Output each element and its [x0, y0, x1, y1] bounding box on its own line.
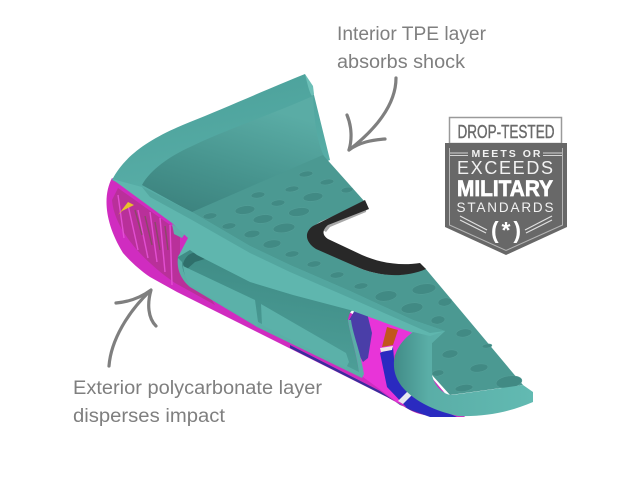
recess shadow	[183, 253, 208, 270]
label: exterior polycarbonate layer	[73, 378, 323, 427]
arrow: to interior layer	[347, 78, 396, 150]
front lip with side button recess	[178, 245, 364, 378]
badge shield: EXCEEDS	[457, 158, 553, 178]
dimples	[203, 170, 523, 393]
floor with dimples	[192, 155, 523, 395]
badge shield	[445, 143, 567, 255]
inner black shell edge	[307, 200, 426, 275]
exterior printed shell	[107, 178, 465, 417]
label: exterior polycarbonate layer: Exterior polycarbonate layer	[73, 378, 323, 399]
side button: volume down	[261, 304, 349, 368]
front strip	[112, 179, 445, 343]
badge shield: STANDARDS	[456, 200, 554, 215]
label: interior TPE layer: absorbs shock	[337, 52, 466, 73]
badge header: DROP-TESTED	[458, 122, 554, 142]
arrow: to exterior layer	[109, 290, 156, 366]
end cap profile	[394, 331, 533, 416]
rim and interior wall	[112, 74, 330, 216]
side button: volume up	[183, 266, 258, 326]
lower lip	[178, 258, 364, 378]
badge: drop-tested military standards	[445, 118, 567, 255]
badge shield: MILITARY	[457, 176, 553, 201]
label: interior TPE layer	[337, 24, 487, 73]
colored cutout window	[348, 309, 457, 417]
label: interior TPE layer: Interior TPE layer	[337, 24, 487, 45]
badge shield: (*)	[491, 217, 521, 243]
badge shield: MEETS OR	[472, 148, 541, 160]
phone case cutaway	[107, 74, 533, 417]
label: exterior polycarbonate layer: disperses impact	[73, 406, 226, 427]
